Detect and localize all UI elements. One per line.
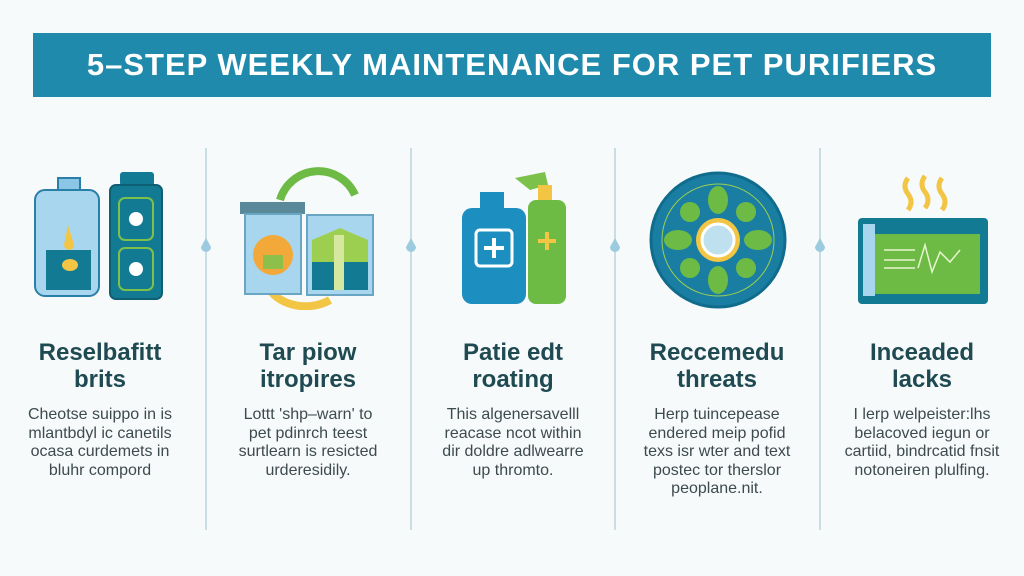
icon: monitor	[858, 174, 988, 304]
panel: step 2	[239, 167, 377, 478]
text 2: Lottt 'shp–warn' to	[244, 406, 372, 423]
icon: spray bottles	[462, 172, 566, 304]
heading 3: roating	[472, 366, 554, 393]
title	[33, 33, 991, 97]
text 5	[845, 406, 1000, 478]
text 2: surtlearn is resicted	[239, 443, 377, 460]
text 3: reacase ncot within	[445, 424, 581, 442]
text 1	[28, 406, 172, 478]
text 4: postec tor therslor	[653, 462, 781, 478]
icon: filter disc	[650, 172, 786, 308]
divider markers	[201, 238, 825, 252]
text 5: notoneiren plulfing.	[854, 462, 990, 478]
heading 2	[260, 339, 356, 393]
heading 1	[39, 339, 162, 393]
heading 3: Patie edt	[463, 339, 563, 366]
text 5: cartiid, bindrcatid fnsit	[845, 443, 999, 460]
heading 5: Inceaded	[870, 339, 974, 366]
icon: purifier	[240, 167, 374, 310]
icon: bottles	[34, 172, 163, 300]
text 4: texs isr wter and text	[644, 443, 790, 460]
heading 4: threats	[677, 366, 757, 393]
heading 2: itropires	[260, 366, 356, 393]
text 1: Cheotse suippo in is	[28, 406, 172, 423]
heading 5	[870, 339, 974, 393]
text 4: peoplane.nit.	[671, 480, 763, 497]
text 1: ocasa curdemets in	[31, 443, 169, 460]
panel: step 3	[442, 172, 584, 478]
heading 1: Reselbafitt	[39, 339, 161, 366]
text 5: belacoved iegun or	[854, 424, 990, 442]
panel: step 4	[644, 172, 790, 497]
text 4: endered meip pofid	[648, 424, 785, 442]
text 2: urderesidily.	[265, 462, 351, 478]
panel: step 5	[845, 174, 1000, 478]
text 2: pet pdinrch teest	[249, 424, 367, 442]
text 3: up thromto.	[473, 462, 553, 478]
text 3: This algenersavelll	[447, 406, 579, 423]
title: 5–STEP WEEKLY MAINTENANCE FOR PET PURIFIERS	[87, 47, 937, 82]
text 5: I lerp welpeister:lhs	[854, 406, 990, 423]
text 1: mlantbdyl ic canetils	[28, 424, 172, 442]
text 3: dir doldre adlwearre	[442, 443, 584, 460]
text 4	[644, 406, 790, 497]
heading 4: Reccemedu	[650, 339, 784, 366]
text 3	[442, 406, 584, 478]
text 2	[239, 406, 377, 478]
heading 2: Tar piow	[260, 339, 356, 366]
heading 4	[650, 339, 784, 393]
heading 5: lacks	[892, 366, 952, 393]
text 4: Herp tuincepease	[654, 406, 780, 423]
heading 1: brits	[74, 366, 126, 393]
text 1: bluhr compord	[49, 462, 151, 478]
panel: step 1	[28, 172, 172, 478]
heading 3	[463, 339, 563, 393]
